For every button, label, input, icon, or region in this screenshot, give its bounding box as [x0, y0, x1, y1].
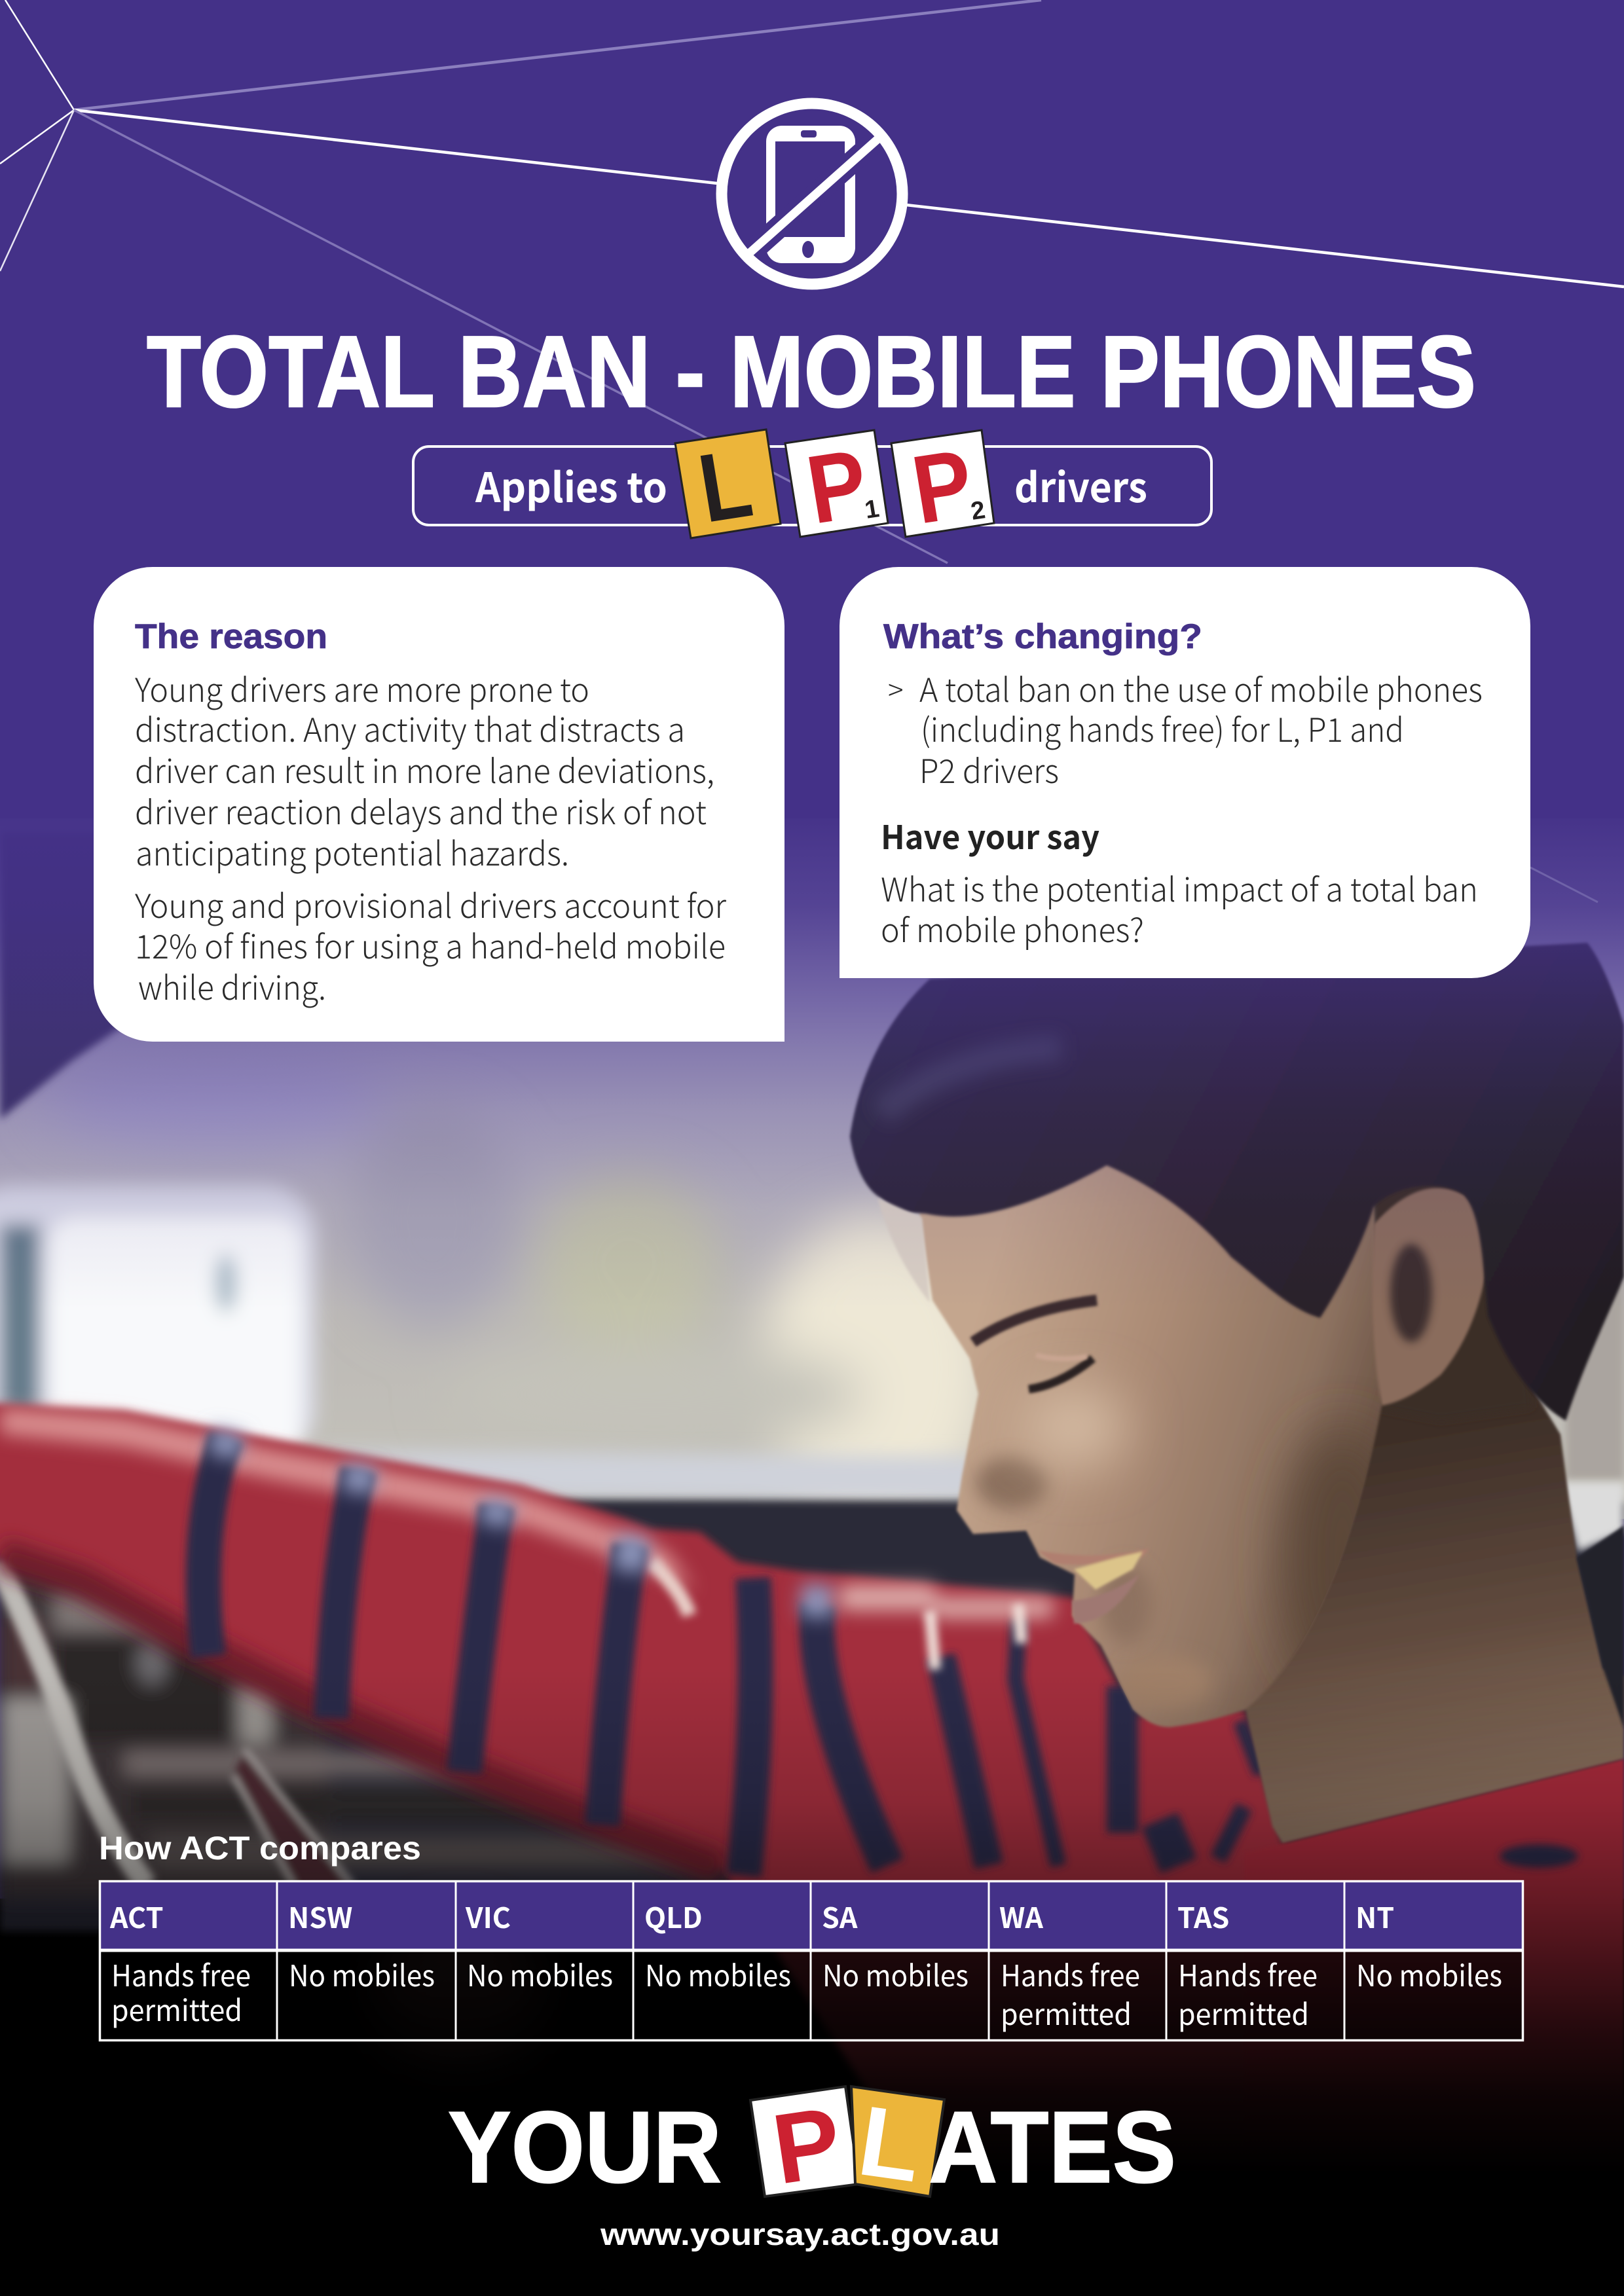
table body row: Hands free	[1001, 1952, 1140, 1995]
text block: reason paragraph 1: distraction. Any activity that distracts a	[135, 704, 685, 752]
panel: the reason	[94, 567, 784, 1042]
mirror	[0, 1185, 316, 1460]
bottom dark fade	[0, 1669, 1624, 2296]
table body row: permitted	[1178, 1991, 1309, 2033]
heading: have your say: Have your say	[881, 812, 1099, 859]
text block: reason paragraph 1: anticipating potential hazards.	[136, 828, 569, 875]
table header row: SA	[822, 1896, 858, 1937]
face	[919, 1152, 1401, 1727]
shade behind ear	[1369, 1172, 1532, 1421]
text block: reason paragraph 1: driver reaction delays and the risk of not	[135, 787, 707, 834]
bullet list: P2 drivers	[919, 746, 1059, 793]
text block: reason paragraph 2: while driving.	[138, 962, 326, 1010]
bullet list: >	[888, 667, 904, 709]
eyebrow	[973, 1300, 1097, 1342]
bright hair fringe	[877, 1198, 930, 1303]
radiating lines	[0, 0, 1624, 902]
collar stripe patch	[1500, 1844, 1578, 1868]
table body row: permitted	[1001, 1991, 1132, 2033]
heading: the reason: The reason	[135, 617, 327, 656]
purple fade overlay	[0, 805, 1624, 1316]
table body row: permitted	[111, 1987, 242, 2030]
logo P plate: P	[766, 2086, 848, 2206]
ear	[1373, 1188, 1486, 1406]
icon: no mobile phone	[722, 103, 902, 284]
logo: your plates: YOUR	[448, 2090, 722, 2204]
website url: www.yoursay.act.gov.au	[600, 2217, 1000, 2251]
window background	[0, 818, 1624, 1525]
heading: how ACT compares: How ACT compares	[99, 1830, 421, 1867]
table header row: WA	[999, 1896, 1043, 1937]
mouth	[1037, 1548, 1149, 1624]
bullet list: (including hands free) for L, P1 and	[921, 704, 1404, 752]
title: TOTAL BAN - MOBILE PHONES	[147, 315, 1476, 428]
table header row: NT	[1356, 1896, 1394, 1937]
text block: reason paragraph 1: driver can result in more lane deviations,	[135, 746, 714, 793]
photo: teen driver in car	[0, 818, 1624, 2187]
heading: what's changing: What’s changing?	[883, 617, 1202, 656]
P2 plate: 2	[969, 496, 987, 526]
hair	[850, 943, 1624, 1421]
P2 plate: P	[905, 429, 980, 544]
table header row: TAS	[1177, 1896, 1229, 1937]
sleeve shading	[0, 1555, 722, 1869]
table header row: VIC	[465, 1896, 511, 1937]
background black base	[0, 1899, 1624, 2296]
table: state comparison	[99, 1880, 1524, 2041]
logo: your plates: ATES	[929, 2090, 1176, 2204]
table header row: NSW	[288, 1896, 352, 1937]
bullet list: A total ban on the use of mobile phones	[919, 665, 1483, 712]
table header row: ACT	[109, 1896, 163, 1937]
table body row: No mobiles	[289, 1952, 435, 1995]
table body row	[111, 1952, 1502, 2033]
shoulder glare	[838, 1584, 1054, 1618]
arm in striped sleeve	[0, 1403, 1375, 2187]
text block: reason paragraph 2: 12% of fines for using a hand-held mobile	[135, 921, 726, 968]
text block: have your say	[881, 864, 1478, 952]
text block: have your say: What is the potential impact of a total ban	[881, 864, 1478, 911]
table body row: No mobiles	[467, 1952, 613, 1995]
P1 plate: 1	[862, 494, 881, 524]
dim hand below table	[373, 1918, 544, 2062]
dashboard	[0, 1277, 1624, 1931]
phone in hand	[233, 1749, 353, 1892]
table body row: No mobiles	[822, 1952, 969, 1995]
L plate: L	[692, 429, 759, 543]
table header row: QLD	[644, 1896, 703, 1937]
bullet list	[888, 665, 1483, 793]
table body row: Hands free	[111, 1952, 251, 1995]
text block: reason paragraph 1	[135, 665, 714, 875]
text block: reason paragraph 2	[135, 881, 727, 1010]
logo: your plates	[448, 2085, 1176, 2206]
back seat edge	[1577, 1525, 1624, 1728]
neck	[1172, 1312, 1624, 1844]
steering wheel	[0, 1561, 147, 1886]
P1 plate: P	[800, 429, 875, 544]
table header row	[109, 1896, 1394, 1937]
stripe highlights	[223, 1430, 819, 1617]
sleeve stripes	[204, 1437, 1261, 1876]
sun highlights on sleeve	[0, 1408, 694, 1591]
text block: reason paragraph 1: Young drivers are more prone to	[135, 665, 589, 712]
table body row: Hands free	[1178, 1952, 1318, 1995]
table body row: No mobiles	[645, 1952, 791, 1995]
text block: reason paragraph 2: Young and provisional drivers account for	[135, 881, 727, 928]
text block: have your say: of mobile phones?	[881, 905, 1144, 952]
panel: what's changing	[840, 567, 1530, 978]
hair highlight	[881, 1048, 1061, 1113]
banner: applies to L P1 P2 drivers	[413, 429, 1211, 544]
eye	[1029, 1358, 1093, 1389]
L plate	[675, 429, 781, 543]
text: applies to: Applies to	[475, 455, 667, 514]
table body row: No mobiles	[1356, 1952, 1502, 1995]
text: drivers: drivers	[1014, 455, 1147, 514]
shirt collar	[1244, 1759, 1624, 2187]
roof pillar	[0, 831, 196, 1120]
logo L plate: L	[852, 2085, 929, 2203]
